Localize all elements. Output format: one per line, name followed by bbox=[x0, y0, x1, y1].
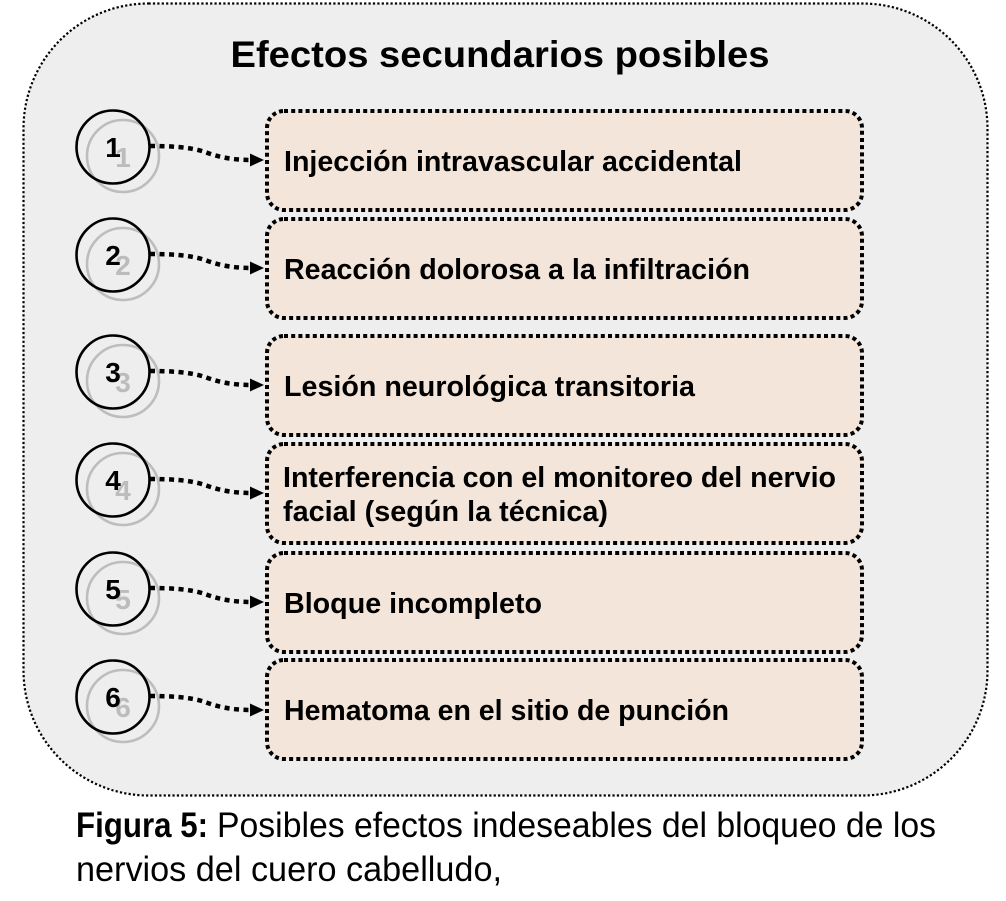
item 4 bbox=[76, 444, 862, 543]
number badge 2 bbox=[76, 218, 159, 300]
number badge 4: 4 bbox=[105, 465, 121, 496]
box 1 bbox=[267, 111, 862, 210]
number badge 1: 1 bbox=[115, 142, 131, 173]
box 3 bbox=[267, 336, 862, 435]
label 5: Bloque incompleto bbox=[284, 588, 542, 620]
item 5 bbox=[76, 552, 862, 652]
number badge 3: 3 bbox=[115, 367, 131, 398]
item 2 bbox=[76, 218, 862, 318]
label 6: Hematoma en el sitio de punción bbox=[284, 695, 729, 727]
number badge 5: 5 bbox=[105, 574, 121, 605]
box 2 bbox=[267, 219, 862, 318]
caption: nervios del cuero cabelludo, bbox=[76, 849, 502, 889]
label 4: facial (según la técnica) bbox=[283, 496, 608, 528]
item 6 bbox=[76, 660, 862, 759]
number badge 5 bbox=[76, 552, 159, 634]
label 3: Lesión neurológica transitoria bbox=[284, 371, 696, 403]
box 6 bbox=[267, 660, 862, 759]
label 4 bbox=[283, 462, 836, 528]
arrow 3 bbox=[150, 371, 264, 392]
title: Efectos secundarios posibles bbox=[230, 33, 770, 75]
label 4: Interferencia con el monitoreo del nervio bbox=[283, 462, 836, 494]
number badge 3: 3 bbox=[105, 357, 121, 388]
number badge 1: 1 bbox=[105, 132, 121, 163]
arrow 6 bbox=[150, 696, 264, 716]
arrow 1 bbox=[150, 146, 264, 166]
arrow 2 bbox=[150, 254, 264, 274]
label 2: Reacción dolorosa a la infiltración bbox=[284, 254, 750, 286]
caption: Posibles efectos indeseables del bloqueo de los bbox=[217, 805, 936, 845]
box 4 bbox=[267, 444, 862, 543]
number badge 4 bbox=[76, 444, 159, 525]
label 1: Injección intravascular accidental bbox=[284, 146, 742, 178]
arrow 4 bbox=[150, 479, 264, 500]
number badge 6: 6 bbox=[115, 692, 131, 723]
arrow 5 bbox=[150, 588, 264, 608]
number badge 4: 4 bbox=[115, 475, 131, 506]
number badge 2: 2 bbox=[105, 240, 121, 271]
box 5 bbox=[267, 553, 862, 652]
number badge 5: 5 bbox=[115, 584, 131, 615]
item 3 bbox=[76, 336, 862, 435]
number badge 2: 2 bbox=[115, 250, 131, 281]
caption bbox=[76, 805, 936, 889]
number badge 6 bbox=[76, 660, 159, 742]
item 1 bbox=[76, 110, 862, 210]
number badge 6: 6 bbox=[105, 682, 121, 713]
number badge 3 bbox=[76, 336, 159, 417]
caption: Figura 5: bbox=[76, 805, 208, 845]
number badge 1 bbox=[76, 110, 159, 192]
